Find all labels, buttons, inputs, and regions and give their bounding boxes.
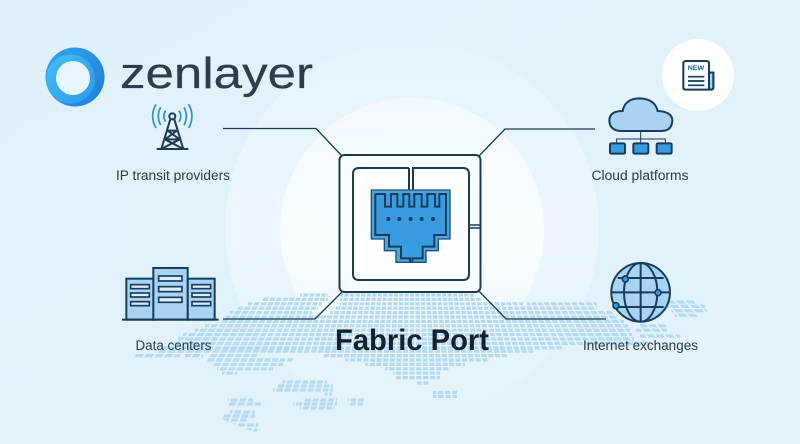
icon: newspaper: NEW xyxy=(688,65,705,72)
inner frame xyxy=(353,168,469,280)
icon: cloud platforms xyxy=(609,98,672,154)
icon: transmission tower xyxy=(153,104,192,149)
logo wordmark: zenlayer xyxy=(120,49,313,98)
logo ring xyxy=(46,48,104,106)
logo: zenlayer xyxy=(46,48,313,106)
label: IP transit providers: IP transit providers xyxy=(116,168,230,183)
connector: top left xyxy=(223,128,354,167)
connector: bottom left xyxy=(223,281,354,319)
outer glow circle xyxy=(225,41,599,415)
title: Fabric Port: Fabric Port xyxy=(335,324,489,357)
port frame xyxy=(340,155,481,292)
inner glow circle xyxy=(280,98,544,362)
dotted world map xyxy=(133,290,707,430)
connector: top right xyxy=(467,129,595,167)
label: Internet exchanges: Internet exchanges xyxy=(583,338,698,353)
label: Data centers: Data centers xyxy=(136,338,212,353)
news badge xyxy=(662,39,734,111)
label: Cloud platforms: Cloud platforms xyxy=(592,168,689,183)
connector: bottom right xyxy=(469,282,606,319)
icon: ethernet jack xyxy=(371,190,450,262)
icon: globe xyxy=(611,263,670,322)
badge circle xyxy=(662,39,734,111)
outer frame xyxy=(340,155,480,292)
icon: data centers xyxy=(122,268,219,320)
